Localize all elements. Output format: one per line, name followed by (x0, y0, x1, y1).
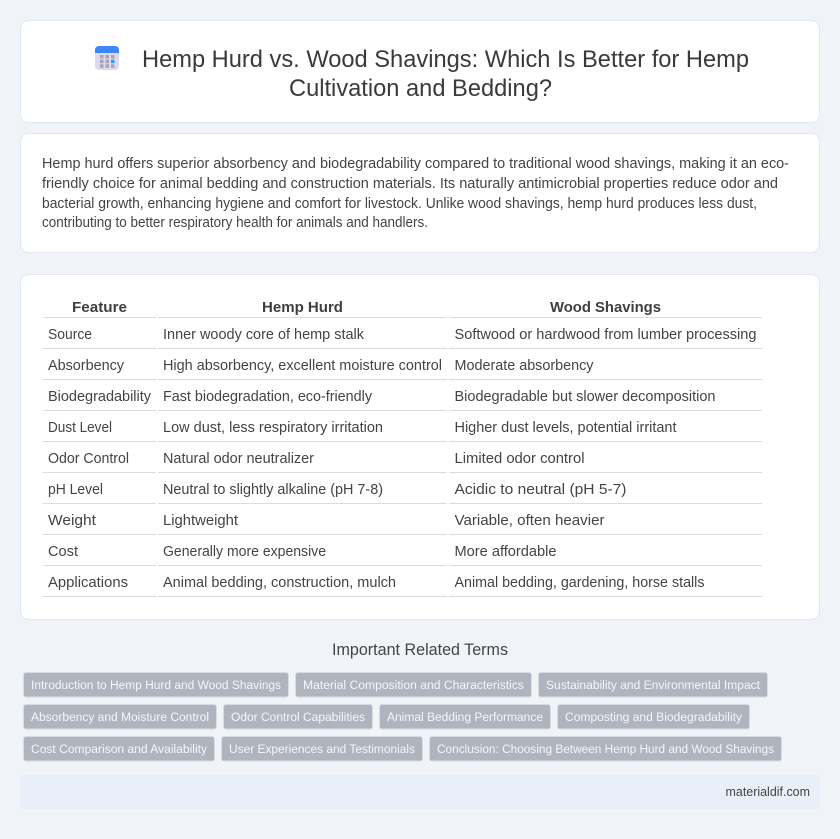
row: weight: Weight (48, 513, 96, 529)
tag: Animal Bedding Performance (387, 710, 543, 724)
icon: calendar (95, 46, 119, 70)
panel: header (20, 20, 820, 122)
heading: related terms: Important Related Terms (332, 641, 508, 659)
row: biodegradability: Biodegradable but slower decomposition (454, 389, 716, 405)
row: odor control (48, 451, 584, 467)
row: odor control: Limited odor control (454, 451, 584, 467)
panel: intro text (20, 134, 820, 252)
tag (430, 736, 782, 761)
row: cost: Cost (48, 544, 78, 560)
row: absorbency: Absorbency (48, 358, 125, 374)
row: dust level: Low dust, less respiratory irritation (163, 420, 383, 436)
row: biodegradability: Biodegradability (48, 389, 152, 405)
tag (24, 704, 216, 729)
row: dust level (48, 420, 677, 436)
tag (224, 704, 372, 729)
row: source: Source (48, 327, 92, 343)
tag: Odor Control Capabilities (231, 710, 365, 724)
tag: Cost Comparison and Availability (31, 742, 208, 756)
row: weight: Lightweight (163, 513, 238, 529)
row: source: Inner woody core of hemp stalk (163, 327, 365, 343)
related term tags (24, 672, 782, 761)
row: applications: Animal bedding, construction, mulch (163, 575, 396, 591)
row: cost: More affordable (454, 544, 556, 560)
table header: Hemp Hurd (262, 300, 343, 316)
tag (558, 704, 750, 729)
row: source: Softwood or hardwood from lumber processing (454, 327, 756, 343)
tag: Composting and Biodegradability (565, 710, 743, 724)
table header: Wood Shavings (550, 300, 661, 316)
tag (380, 704, 550, 729)
panel: intro text: friendly choice for animal bedding and construction materials. Its naturally antimicrobial properties reduce odor and (42, 176, 778, 192)
title: Cultivation and Bedding? (289, 75, 552, 102)
tag (24, 672, 288, 697)
panel: intro text: Hemp hurd offers superior absorbency and biodegradability compared to traditional wood shavings, making it an eco- (42, 156, 789, 172)
row: dust level: Higher dust levels, potential irritant (454, 420, 677, 436)
row: pH level: pH Level (48, 482, 103, 498)
table header: Feature (72, 300, 127, 316)
tag (222, 736, 422, 761)
title: Hemp Hurd vs. Wood Shavings: Which Is Better for Hemp (142, 46, 749, 73)
panel: comparison table (20, 274, 820, 620)
tag: Material Composition and Characteristics (303, 678, 524, 692)
tag (296, 672, 532, 697)
table rules (43, 318, 762, 596)
row: pH level: Neutral to slightly alkaline (pH 7-8) (163, 482, 383, 498)
row: applications: Animal bedding, gardening, horse stalls (454, 575, 704, 591)
row: weight: Variable, often heavier (454, 513, 605, 529)
tag (538, 672, 768, 697)
row: odor control: Odor Control (48, 451, 129, 467)
row: dust level: Dust Level (48, 420, 112, 436)
row: pH level (48, 482, 626, 498)
tag: Sustainability and Environmental Impact (546, 678, 761, 692)
row: pH level: Acidic to neutral (pH 5-7) (454, 482, 626, 498)
row: odor control: Natural odor neutralizer (163, 451, 314, 467)
row: biodegradability: Fast biodegradation, eco-friendly (163, 389, 373, 405)
footer: materialdif.com (726, 784, 810, 799)
row: source (48, 327, 756, 343)
title (142, 46, 749, 102)
tag: Introduction to Hemp Hurd and Wood Shavings (31, 678, 281, 692)
tag (24, 736, 214, 761)
row: absorbency: Moderate absorbency (454, 358, 594, 374)
panel: intro text: bacterial growth, enhancing hygiene and comfort for livestock. Unlike wood shavings, hemp hurd produces less dust, (42, 196, 757, 212)
row: biodegradability (48, 389, 716, 405)
tag: User Experiences and Testimonials (229, 742, 415, 756)
row: applications (48, 575, 704, 591)
row: absorbency (48, 358, 594, 374)
table header (72, 300, 661, 316)
tag: Conclusion: Choosing Between Hemp Hurd and Wood Shavings (437, 742, 774, 756)
row: absorbency: High absorbency, excellent moisture control (163, 358, 442, 374)
row: cost (48, 544, 556, 560)
row: weight (48, 513, 605, 529)
tag: Absorbency and Moisture Control (31, 710, 209, 724)
row: applications: Applications (48, 575, 128, 591)
row: cost: Generally more expensive (163, 544, 326, 560)
footer (20, 775, 820, 809)
panel: intro text: contributing to better respiratory health for animals and handlers. (42, 215, 428, 231)
